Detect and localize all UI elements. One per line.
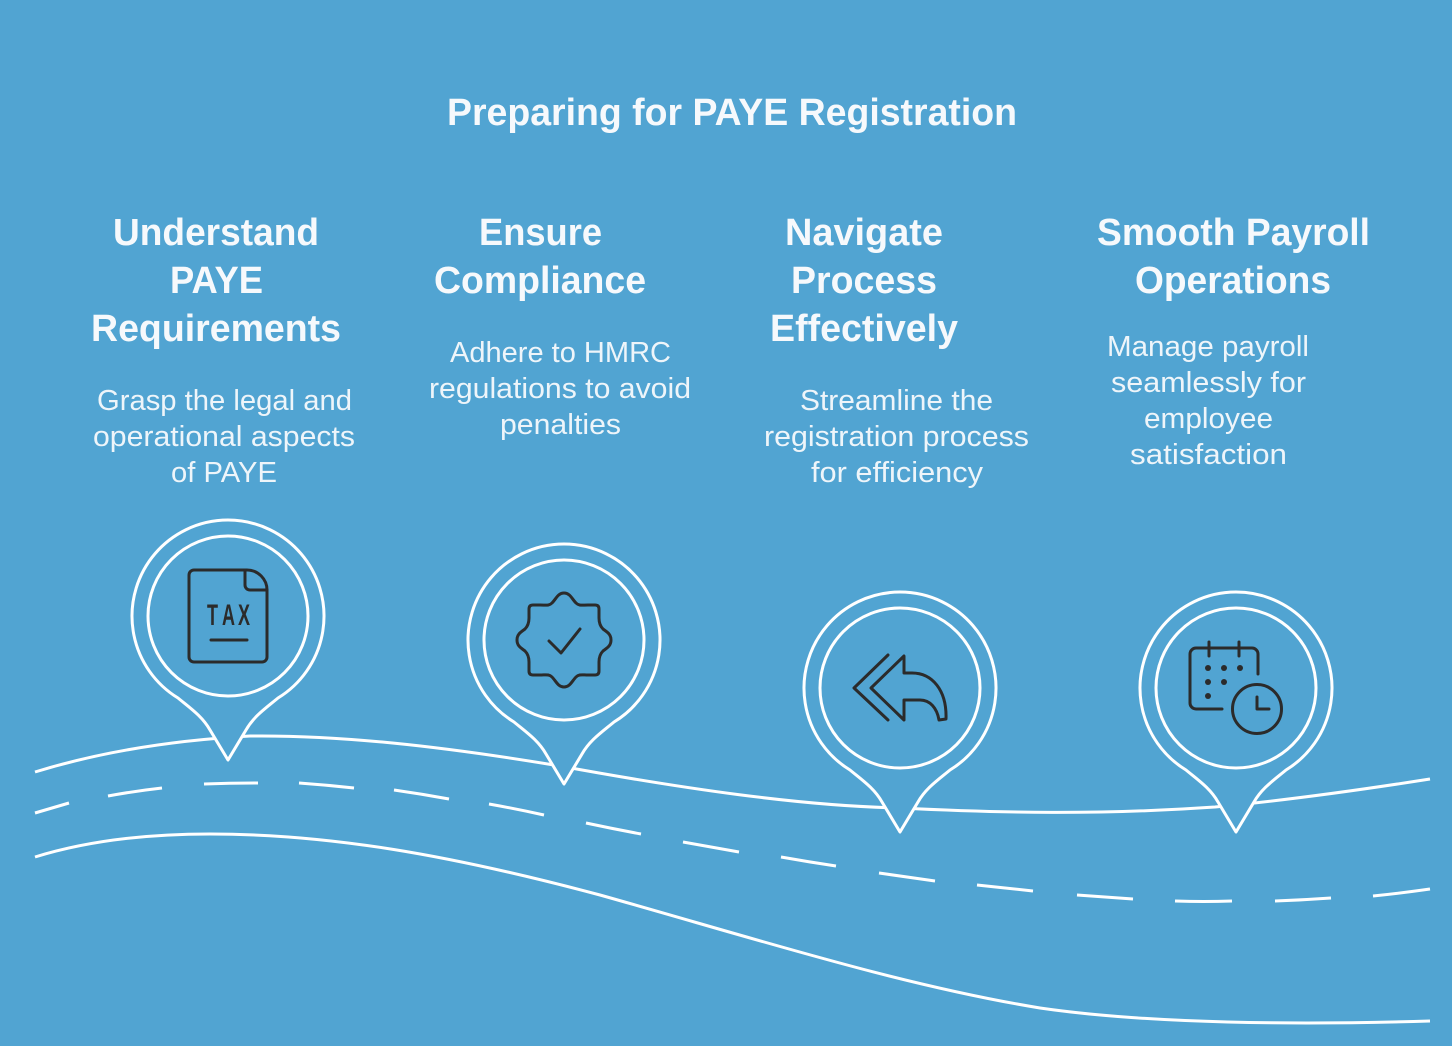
heading: navigate process effectively: Effectively xyxy=(770,308,958,350)
road illustration xyxy=(35,736,1430,1023)
pin: navigate arrow xyxy=(804,592,996,832)
heading: smooth payroll operations: Operations xyxy=(1135,260,1331,302)
heading: ensure compliance: Ensure xyxy=(479,212,602,254)
icon: double reply arrow xyxy=(854,655,946,720)
heading: understand PAYE requirements: PAYE xyxy=(170,260,263,302)
heading: smooth payroll operations xyxy=(1097,212,1370,302)
heading: understand PAYE requirements: Understand xyxy=(113,212,319,254)
icon: check badge xyxy=(517,593,611,687)
pin: payroll calendar xyxy=(1140,592,1332,832)
icon: calendar and clock xyxy=(1190,642,1282,734)
panel: understand PAYE requirements text xyxy=(91,212,355,489)
text: payroll description: seamlessly for xyxy=(1111,367,1306,399)
panel: navigate process text xyxy=(764,212,1029,489)
text: compliance description: regulations to avoid xyxy=(429,373,691,405)
text: understand description: operational aspects xyxy=(93,421,355,453)
pin: compliance badge xyxy=(468,544,660,784)
text: compliance description: penalties xyxy=(500,409,621,441)
heading: navigate process effectively: Navigate xyxy=(785,212,943,254)
text: understand description: Grasp the legal and xyxy=(97,385,352,417)
text: navigate description: Streamline the xyxy=(800,385,993,417)
icon: tax document: TAX xyxy=(207,600,250,632)
pin: tax document xyxy=(132,520,324,760)
heading: ensure compliance: Compliance xyxy=(434,260,646,302)
text: payroll description: employee xyxy=(1144,403,1273,435)
text: compliance description xyxy=(429,337,691,441)
text: navigate description xyxy=(764,385,1029,489)
text: understand description xyxy=(93,385,355,489)
text: understand description: of PAYE xyxy=(171,457,277,489)
heading: navigate process effectively: Process xyxy=(791,260,937,302)
text: navigate description: registration process xyxy=(764,421,1029,453)
heading: understand PAYE requirements xyxy=(91,212,341,350)
heading: ensure compliance xyxy=(434,212,646,302)
panel: smooth payroll text xyxy=(1097,212,1370,471)
text: compliance description: Adhere to HMRC xyxy=(450,337,671,369)
text: payroll description xyxy=(1107,331,1309,471)
title: Preparing for PAYE Registration xyxy=(447,92,1017,134)
heading: understand PAYE requirements: Requirements xyxy=(91,308,341,350)
text: payroll description: Manage payroll xyxy=(1107,331,1309,363)
text: navigate description: for efficiency xyxy=(811,457,984,489)
heading: navigate process effectively xyxy=(770,212,958,350)
heading: smooth payroll operations: Smooth Payroll xyxy=(1097,212,1370,254)
text: payroll description: satisfaction xyxy=(1130,439,1287,471)
panel: ensure compliance text xyxy=(429,212,691,441)
icon: tax document xyxy=(189,570,267,662)
